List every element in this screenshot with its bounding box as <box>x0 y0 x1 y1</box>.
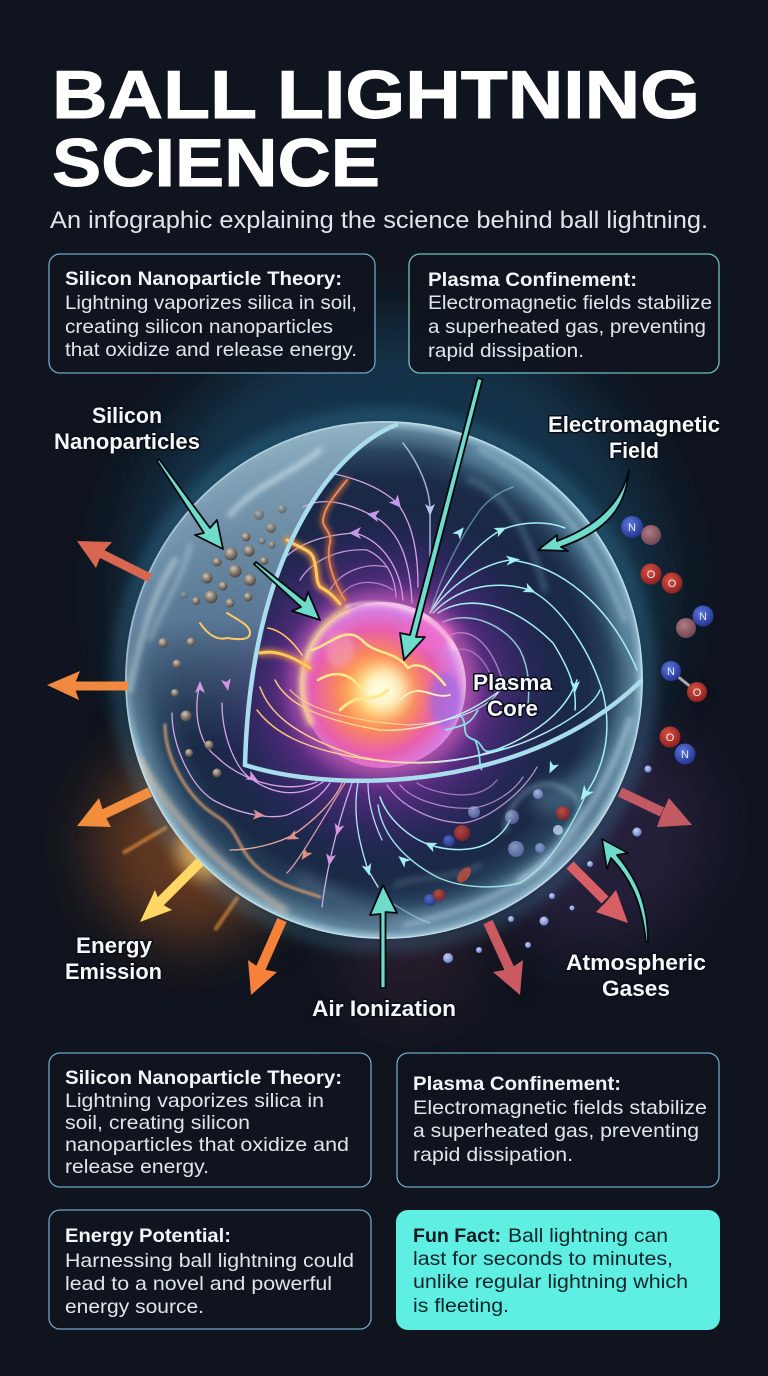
molecule: O2: O <box>647 569 656 581</box>
card body: nanoparticles that oxidize and <box>65 1134 349 1156</box>
molecule: N-O faint <box>621 516 661 545</box>
arrow: lower right rose <box>570 865 628 923</box>
core magenta and blue patches <box>326 619 461 728</box>
fun fact text: last for seconds to minutes, <box>413 1248 673 1270</box>
card body: creating silicon nanoparticles <box>65 316 333 338</box>
panel: plasma confinement (bottom) <box>397 1053 719 1187</box>
shell fog <box>300 450 635 925</box>
card body: Lightning vaporizes silica in <box>65 1090 324 1112</box>
molecule: O-N <box>660 726 696 764</box>
callout arrow: to core <box>254 562 320 620</box>
label: electromagnetic field: Field <box>609 438 659 463</box>
label: plasma core: Plasma <box>473 670 553 695</box>
label: atmospheric gases: Atmospheric <box>566 950 706 975</box>
sphere body <box>125 421 643 939</box>
magnetic field lines: violet lower fan <box>172 683 537 907</box>
callout arrow: atmospheric gases <box>602 839 648 942</box>
label: silicon nanoparticles: Nanoparticles <box>54 429 200 454</box>
subtitle: An infographic explaining the science behind ball lightning. <box>50 207 708 234</box>
panel: silicon nanoparticle theory (bottom) <box>49 1053 371 1187</box>
card body: Electromagnetic fields stabilize <box>413 1097 707 1119</box>
card heading: Plasma Confinement: <box>428 269 637 291</box>
card body: rapid dissipation. <box>428 340 584 362</box>
label: air ionization: Air Ionization <box>312 996 456 1021</box>
card heading: Plasma Confinement: <box>413 1073 621 1095</box>
label: atmospheric gases <box>566 950 706 1001</box>
card body <box>413 1097 707 1166</box>
arrow: right rose <box>620 792 692 827</box>
molecule: N-O faint 2 <box>676 606 714 638</box>
atmospheric gas dots <box>443 766 652 963</box>
fun fact text: Ball lightning can <box>508 1225 668 1247</box>
panel: fun fact <box>396 1210 720 1330</box>
energy emission arrows <box>47 541 692 995</box>
molecule: N-O faint 2: N <box>699 611 707 623</box>
outer sphere glow <box>120 416 648 944</box>
label: electromagnetic field: Electromagnetic <box>548 412 720 437</box>
plasma core <box>289 591 477 779</box>
callout arrow: silicon nanoparticles <box>157 459 223 549</box>
shell wisps <box>130 450 320 910</box>
panel: plasma confinement (top) <box>409 254 719 373</box>
card body <box>65 292 357 361</box>
fun fact text: is fleeting. <box>413 1295 509 1317</box>
molecule: N-O faint: N <box>628 522 636 534</box>
molecule: O2 <box>640 564 682 594</box>
card body: release energy. <box>65 1156 209 1178</box>
label: electromagnetic field <box>548 412 720 463</box>
fun fact text: Fun Fact: <box>413 1225 501 1247</box>
card body <box>428 292 712 362</box>
label: energy emission <box>65 933 162 984</box>
callout arrow: plasma confinement <box>400 378 482 660</box>
card body: lead to a novel and powerful <box>65 1273 332 1295</box>
bright centre <box>362 668 406 712</box>
fun fact text: unlike regular lightning which <box>413 1271 688 1293</box>
card heading: Silicon Nanoparticle Theory: <box>65 1067 342 1089</box>
warm rim flame <box>165 725 320 897</box>
card body: Harnessing ball lightning could <box>65 1250 354 1272</box>
orbit rings around core <box>257 680 600 763</box>
card body: that oxidize and release energy. <box>65 339 357 361</box>
card body: Electromagnetic fields stabilize <box>428 292 712 314</box>
card body: a superheated gas, preventing <box>428 316 706 338</box>
purple interior glow <box>194 500 574 880</box>
sphere <box>120 416 648 944</box>
card body <box>65 1090 349 1178</box>
label: atmospheric gases: Gases <box>602 976 670 1001</box>
molecule: N-O bonded: N <box>667 666 675 678</box>
label: energy emission: Emission <box>65 959 162 984</box>
panel: silicon nanoparticle theory (top) <box>49 254 375 373</box>
arrow: bottom rose <box>488 922 523 995</box>
energy emission glow <box>123 822 238 930</box>
arrow: left <box>47 671 128 700</box>
molecule: N-O bonded <box>661 661 707 702</box>
molecule: N-O bonded: O <box>693 687 702 699</box>
core ball <box>300 602 466 768</box>
card heading: Silicon Nanoparticle Theory: <box>65 268 342 290</box>
left glass shell <box>125 422 398 790</box>
title <box>52 57 700 201</box>
card body: Lightning vaporizes silica in soil, <box>65 292 357 314</box>
lightning filaments <box>200 480 347 668</box>
card body: rapid dissipation. <box>413 1144 573 1166</box>
callout arrow: electromagnetic field <box>538 470 629 551</box>
panel: energy potential <box>49 1210 371 1329</box>
card body: a superheated gas, preventing <box>413 1120 699 1142</box>
molecule: O2: O <box>668 578 677 590</box>
arrow: lower left <box>77 792 150 827</box>
arrow: yellow <box>140 862 200 922</box>
magnetic field lines: cyan fan <box>403 443 637 792</box>
arrow: bottom orange <box>248 920 282 995</box>
label: energy emission: Energy <box>76 933 153 958</box>
label: silicon nanoparticles: Silicon <box>92 403 162 428</box>
blue plasma sparks <box>445 710 508 770</box>
label: plasma core: Core <box>487 696 538 721</box>
core halo <box>289 591 477 779</box>
title: BALL LIGHTNING <box>52 57 700 133</box>
gas particles inside sphere <box>424 789 570 906</box>
card body: energy source. <box>65 1296 204 1318</box>
label: plasma core <box>473 670 553 721</box>
silicon nanoparticles <box>158 504 286 778</box>
magnetic field lines: cyan lower sweep <box>378 792 587 923</box>
molecule: O-N: O <box>666 732 675 744</box>
card body <box>65 1250 354 1318</box>
callout arrow: air ionization <box>370 885 397 988</box>
title: SCIENCE <box>52 125 380 201</box>
cutaway rim <box>245 424 642 781</box>
fun fact text <box>413 1225 688 1317</box>
molecules <box>621 516 714 764</box>
card body: soil, creating silicon <box>65 1112 250 1134</box>
field line arrowheads <box>195 495 594 877</box>
label: silicon nanoparticles <box>54 403 200 454</box>
core lightning <box>312 635 450 710</box>
sphere rim highlight <box>126 422 642 938</box>
card heading: Energy Potential: <box>65 1225 231 1247</box>
magnetic field lines: violet upper arcs <box>280 473 418 603</box>
molecule: O-N: N <box>681 749 689 761</box>
arrow: upper left <box>77 541 150 578</box>
